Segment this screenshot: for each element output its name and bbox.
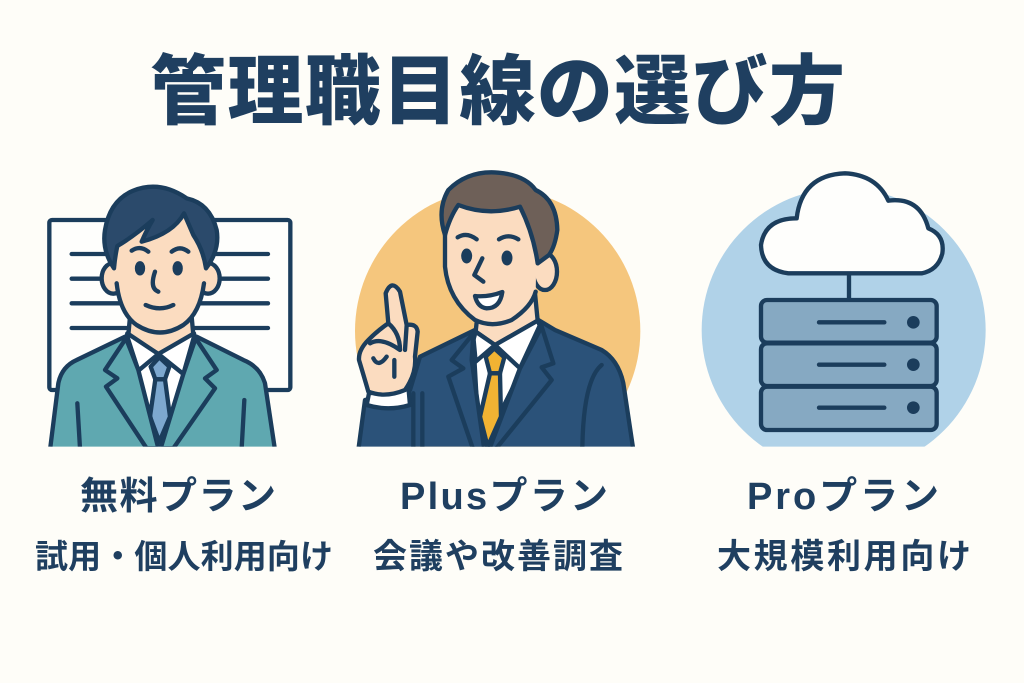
ear [533, 253, 557, 290]
hair [104, 187, 217, 268]
cloud [761, 173, 943, 273]
facial features [132, 248, 188, 308]
shirt [473, 321, 542, 447]
server rack [761, 300, 937, 430]
sleeve lines [413, 365, 602, 448]
illustration: man in navy suit pointing up [355, 172, 640, 474]
description: plus plan: 会議や改善調査 [373, 538, 623, 576]
shirt and collar [126, 333, 196, 442]
blue circle [702, 194, 986, 447]
illustration: man in teal suit with document [49, 187, 290, 450]
lapels [448, 327, 553, 450]
description: pro plan: 大規模利用向け [717, 538, 971, 576]
face [116, 218, 204, 319]
suit [50, 337, 275, 450]
label: free plan: 無料プラン [80, 476, 276, 518]
panel: pro plan [702, 173, 986, 576]
label: pro plan: Proプラン [747, 476, 939, 518]
tie [480, 348, 504, 447]
neck [128, 317, 193, 354]
server indicators [819, 316, 920, 414]
hand pointing up [359, 285, 418, 408]
tie [150, 357, 170, 442]
orange circle [355, 198, 640, 447]
sleeve lines [77, 400, 244, 448]
title: 管理職目線の選び方 [150, 50, 845, 135]
panel: plus plan [355, 172, 640, 576]
face [447, 208, 536, 320]
facial features [458, 235, 518, 308]
connector [846, 276, 852, 298]
illustration: cloud and server [702, 173, 986, 472]
panel: free plan [35, 187, 333, 575]
hair [442, 172, 557, 263]
neck [476, 293, 538, 345]
ears [102, 263, 220, 294]
document [49, 220, 290, 390]
lapels [105, 338, 217, 448]
description: free plan: 試用・個人利用向け [35, 538, 333, 575]
collar wings [473, 325, 540, 368]
collar wings [127, 337, 194, 374]
suit [358, 320, 633, 450]
label: plus plan: Plusプラン [400, 476, 608, 518]
